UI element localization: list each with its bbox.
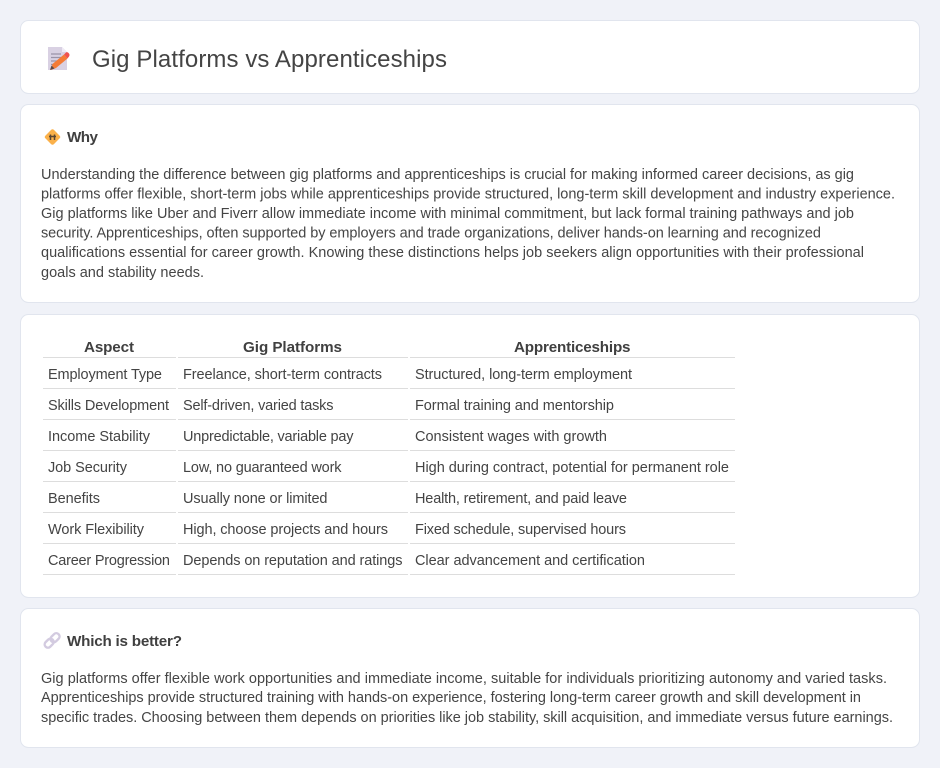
- table row: job security: Low, no guaranteed work: [183, 460, 342, 476]
- table row: career progression: [43, 553, 735, 574]
- table row: employment type: Freelance, short-term contracts: [183, 367, 382, 383]
- table row: job security: High during contract, potential for permanent role: [415, 460, 729, 476]
- panel: why: [20, 104, 920, 302]
- text block: verdict: specific trades. Choosing between them depends on priorities like job stability, skill acquisition, and immediate versus future earnings.: [41, 710, 893, 726]
- text block: why explanation: [41, 167, 895, 281]
- text block: verdict: Apprenticeships provide structured training with hands-on experience, fostering long-term career growth and skill development in: [41, 690, 861, 706]
- text block: why explanation: Gig platforms like Uber and Fiverr allow immediate income with minimal commitment, but lack formal training pathways and job: [41, 206, 854, 222]
- table row: employment type: [43, 367, 735, 388]
- table row: work flexibility: [43, 522, 735, 544]
- table row: career progression: Clear advancement and certification: [415, 553, 645, 569]
- table row: career progression: Depends on reputation and ratings: [183, 553, 402, 569]
- text block: why explanation: platforms offer flexible, short-term jobs while apprenticeships provide structured, long-term skill development and industry experience.: [41, 186, 895, 202]
- table row: work flexibility: Work Flexibility: [48, 522, 145, 538]
- table row: benefits: [43, 491, 735, 512]
- table row: income stability: Unpredictable, variable pay: [183, 429, 354, 445]
- text block: why explanation: security. Apprenticeships, often supported by employers and trade organizations, deliver hands-on learning and recognized: [41, 226, 821, 242]
- text block: verdict: Gig platforms offer flexible work opportunities and immediate income, suitable for individuals prioritizing autonomy and varied tasks.: [41, 671, 887, 687]
- icon: document with pencil: [48, 47, 70, 70]
- heading: why: Why: [67, 129, 99, 146]
- table row: skills development: Self-driven, varied tasks: [183, 398, 334, 414]
- panel: title header: [20, 20, 920, 94]
- text block: why explanation: Understanding the difference between gig platforms and apprenticeships is crucial for making informed career decisions, as gig: [41, 167, 854, 183]
- panel: which is better: [20, 608, 920, 748]
- table row: job security: Job Security: [48, 460, 128, 476]
- icon: chain link: [43, 632, 61, 649]
- icon: orange diamond sign: [44, 129, 61, 145]
- text block: why explanation: qualifications essential for career growth. Knowing these distinctions helps job seekers align opportunities with their professional: [41, 245, 864, 261]
- table row: work flexibility: High, choose projects and hours: [183, 522, 388, 538]
- table header row: [43, 339, 735, 358]
- table row: benefits: Health, retirement, and paid leave: [415, 491, 627, 507]
- table row: job security: [43, 460, 735, 482]
- table row: career progression: Career Progression: [48, 553, 170, 569]
- table row: work flexibility: Fixed schedule, supervised hours: [415, 522, 626, 538]
- title: Gig Platforms vs Apprenticeships: [92, 46, 447, 73]
- text block: verdict: [41, 671, 893, 726]
- heading: which is better: Which is better?: [67, 633, 182, 650]
- table header row: Gig Platforms: [243, 339, 342, 356]
- table row: skills development: Skills Development: [48, 398, 169, 414]
- text block: why explanation: goals and stability needs.: [41, 265, 204, 281]
- table row: benefits: Benefits: [48, 491, 100, 507]
- table row: skills development: [43, 398, 735, 420]
- table row: benefits: Usually none or limited: [183, 491, 328, 507]
- table row: skills development: Formal training and mentorship: [415, 398, 614, 414]
- table header row: Aspect: [84, 339, 134, 356]
- table row: income stability: Income Stability: [48, 429, 151, 445]
- table row: employment type: Employment Type: [48, 367, 162, 383]
- table header row: Apprenticeships: [514, 339, 630, 356]
- panel: comparison table: [20, 314, 920, 598]
- table row: employment type: Structured, long-term employment: [415, 367, 632, 383]
- table row: income stability: Consistent wages with growth: [415, 429, 607, 445]
- table row: income stability: [43, 429, 735, 450]
